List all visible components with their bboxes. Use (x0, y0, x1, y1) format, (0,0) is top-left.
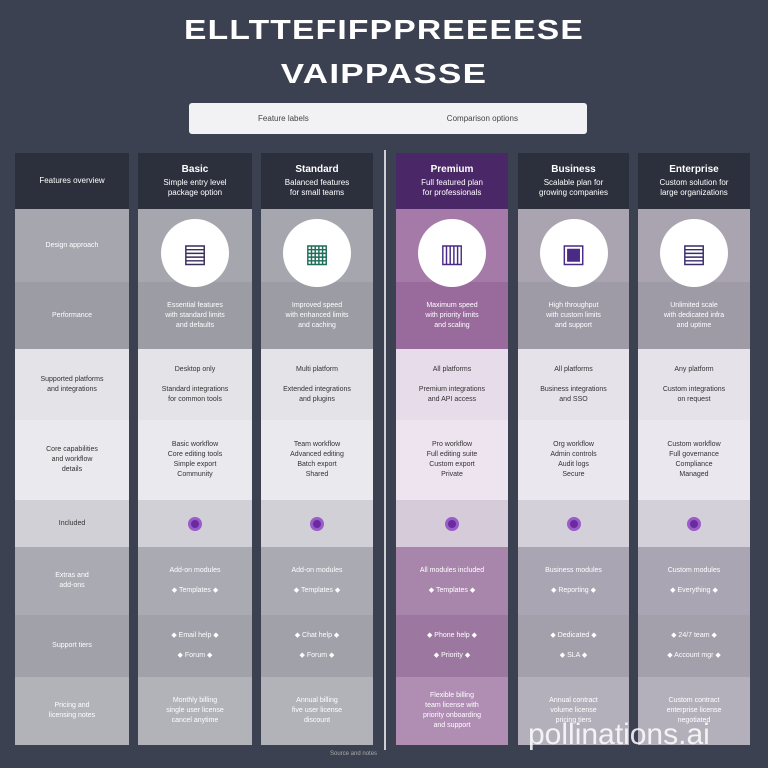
column 5: Custom integrations (663, 386, 725, 392)
column 3 (highlighted) (396, 153, 508, 745)
column 2 (261, 153, 373, 745)
column 4: ◆ SLA ◆ (560, 652, 587, 659)
column: labels: Pricing and (54, 702, 90, 709)
column 1: Basic (182, 164, 208, 174)
footnote: Source and notes (330, 751, 377, 757)
column 3 (highlighted): ◆ Phone help ◆ (427, 632, 477, 639)
column 2: Annual billing (296, 697, 338, 704)
column 5: Full governance (669, 451, 719, 458)
column 4 (518, 153, 629, 745)
column 4: Business integrations (540, 386, 607, 392)
column 2: ◆ Templates ◆ (294, 587, 340, 594)
column 2: Balanced features (285, 178, 349, 186)
column 1: for common tools (168, 396, 222, 402)
icon (660, 218, 728, 286)
watermark: pollinations.ai (528, 718, 710, 751)
column 3 (highlighted): Flexible billing (430, 692, 474, 699)
column: labels: and integrations (47, 386, 97, 392)
column 3 (highlighted): team license with (425, 702, 479, 709)
column 2: five user license (292, 707, 342, 714)
icon: ▤ (183, 238, 207, 268)
column 5: enterprise license (667, 707, 721, 714)
column 2: Standard (295, 164, 339, 174)
column 4: Secure (562, 471, 585, 478)
column 3 (highlighted): Full editing suite (427, 451, 477, 458)
column 2: Multi platform (296, 366, 338, 372)
column: labels (15, 153, 129, 745)
column 3 (highlighted): Full featured plan (421, 178, 483, 186)
column 3 (highlighted): and support (434, 722, 470, 729)
column 3 (highlighted): Custom export (429, 461, 475, 468)
subtitle bar: Comparison options (447, 114, 518, 123)
icon (418, 218, 486, 286)
column 5: Custom modules (668, 567, 720, 574)
column 1: single user license (166, 707, 224, 714)
icon (540, 218, 608, 286)
column 3 (highlighted): for professionals (423, 188, 481, 196)
column: labels: Core capabilities (46, 446, 98, 453)
column 3 (highlighted): and scaling (434, 322, 470, 328)
column: labels: Support tiers (52, 642, 92, 649)
icon: ▥ (440, 238, 464, 268)
column 5: Unlimited scale (670, 302, 718, 308)
column 1: Essential features (167, 302, 223, 308)
column 4: High throughput (549, 302, 598, 308)
column 2: Team workflow (294, 441, 340, 448)
column 3 (highlighted): All modules included (420, 567, 484, 574)
column 3 (highlighted): Premium integrations (419, 386, 485, 392)
icon: ▤ (682, 238, 706, 268)
column 4: ◆ Reporting ◆ (551, 587, 596, 594)
column 1: cancel anytime (172, 717, 218, 724)
column 3 (highlighted): Maximum speed (426, 302, 478, 308)
title (184, 14, 584, 89)
column 2: and caching (298, 322, 336, 328)
column 2: discount (304, 717, 330, 724)
column 4: Admin controls (550, 451, 597, 458)
column 4: Business modules (545, 567, 602, 574)
icon: ▦ (305, 238, 329, 268)
column 3 (highlighted): priority onboarding (423, 712, 481, 719)
column 1: Add-on modules (170, 567, 220, 574)
column 1: Standard integrations (162, 386, 228, 392)
column: labels: Performance (52, 312, 92, 318)
column 2: Extended integrations (283, 386, 351, 392)
column 4: Annual contract (549, 697, 598, 704)
icon: ▣ (561, 238, 586, 268)
column 4: Audit logs (558, 461, 589, 468)
column 5: Managed (679, 471, 709, 478)
title: ELLTTEFIFPPREEEESE (184, 14, 584, 45)
column 3 (highlighted): and API access (428, 396, 476, 402)
column 4: growing companies (539, 188, 608, 196)
column: labels: Features overview (39, 176, 105, 185)
column 5: Compliance (676, 461, 712, 468)
column 5: Custom contract (669, 697, 719, 704)
column 5: large organizations (660, 188, 728, 196)
column: labels: licensing notes (49, 712, 95, 719)
title: VAIPPASSE (281, 58, 487, 89)
column 5: Custom workflow (667, 441, 721, 448)
subtitle bar: Feature labels (258, 114, 309, 123)
column: labels: Extras and (55, 572, 89, 579)
column 3 (highlighted): ◆ Templates ◆ (429, 587, 475, 594)
column 2: Shared (306, 471, 328, 478)
column 4: pricing tiers (556, 717, 591, 724)
column 2: Add-on modules (292, 567, 342, 574)
column: labels: Design approach (46, 242, 98, 248)
column 5: ◆ 24/7 team ◆ (671, 632, 717, 639)
column 5: with dedicated infra (664, 312, 724, 318)
subtitle bar (189, 103, 587, 134)
column 2: ◆ Chat help ◆ (295, 632, 339, 639)
column 1: ◆ Email help ◆ (171, 632, 219, 639)
column 1: package option (168, 188, 222, 196)
column 3 (highlighted): Pro workflow (432, 441, 472, 448)
column 2: ◆ Forum ◆ (300, 652, 334, 659)
column 5: and uptime (677, 322, 711, 328)
column: labels: add-ons (59, 582, 85, 589)
column: labels: Included (59, 520, 85, 526)
column: labels: and workflow (52, 456, 92, 463)
column 5: Enterprise (669, 164, 719, 174)
column 1: Basic workflow (172, 441, 218, 448)
column 5: ◆ Account mgr ◆ (667, 652, 721, 659)
column 2: Advanced editing (290, 451, 344, 458)
icon (283, 218, 351, 286)
column 4: Org workflow (553, 441, 594, 448)
column 4: and SSO (559, 396, 588, 402)
column 1: Community (177, 471, 213, 478)
column 1: Desktop only (175, 366, 215, 372)
column 5: Custom solution for (660, 178, 728, 186)
column 1: and defaults (176, 322, 214, 328)
divider (384, 150, 386, 750)
column 2: for small teams (290, 188, 344, 196)
column 1: Simple entry level (163, 178, 227, 186)
column 1 (138, 153, 252, 745)
column 5: negotiated (678, 717, 710, 724)
column 4: volume license (550, 707, 597, 714)
column 2: with enhanced limits (285, 312, 349, 318)
column 3 (highlighted): ◆ Priority ◆ (434, 652, 470, 659)
column 2: and plugins (299, 396, 335, 402)
column 4: and support (555, 322, 592, 328)
column 1: ◆ Templates ◆ (172, 587, 218, 594)
column 2: Batch export (297, 461, 337, 468)
column 1: Core editing tools (168, 451, 222, 458)
column 3 (highlighted): with priority limits (425, 312, 479, 318)
icon (161, 218, 229, 286)
column 1: Simple export (174, 461, 216, 468)
column 4: Business (551, 164, 596, 174)
column: labels: details (62, 466, 82, 473)
column 3 (highlighted): Private (441, 471, 463, 478)
column 5: ◆ Everything ◆ (670, 587, 718, 594)
column 5 (638, 153, 750, 745)
column 1: ◆ Forum ◆ (178, 652, 212, 659)
column 4: ◆ Dedicated ◆ (550, 632, 597, 639)
column 3 (highlighted): Premium (431, 164, 473, 174)
column 5: Any platform (674, 366, 714, 372)
column 1: Monthly billing (173, 697, 217, 704)
column 2: Improved speed (292, 302, 342, 308)
column: labels: Supported platforms (40, 376, 104, 382)
column 5: on request (677, 396, 711, 402)
column 1: with standard limits (165, 312, 225, 318)
column 4: Scalable plan for (544, 178, 603, 186)
column 4: All platforms (554, 366, 593, 372)
column 4: with custom limits (546, 312, 601, 318)
column 3 (highlighted): All platforms (433, 366, 471, 372)
